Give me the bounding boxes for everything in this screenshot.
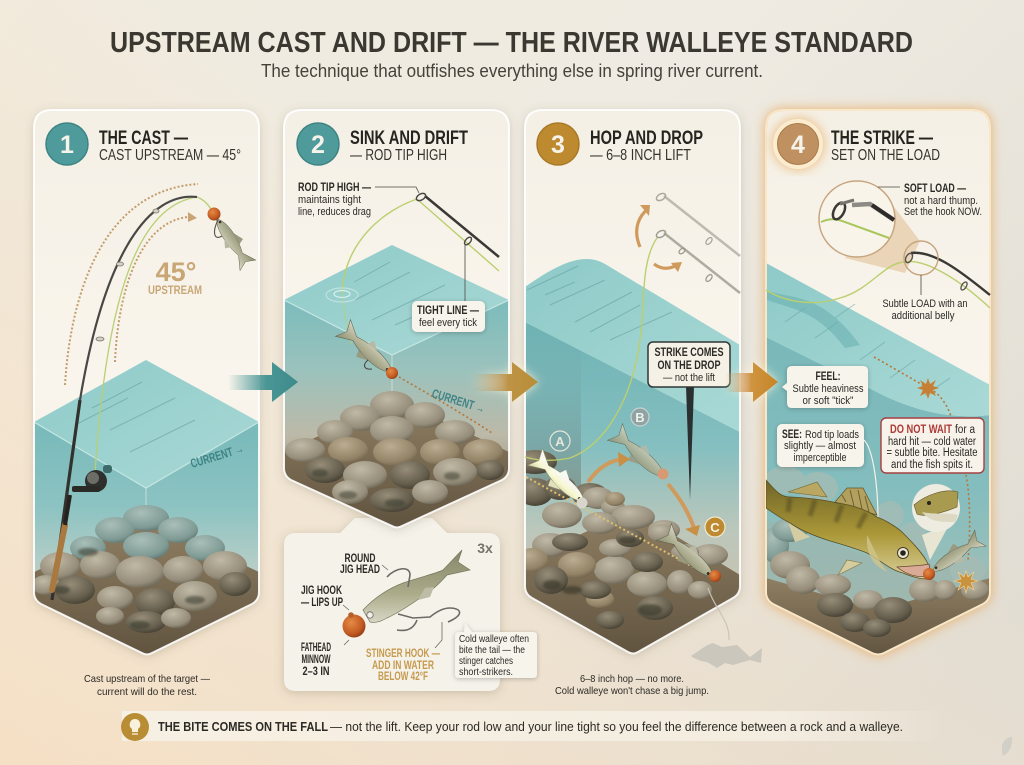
- subtle load label: additional belly: [892, 310, 955, 322]
- drifting minnow and jig: [335, 320, 400, 381]
- see callout: slightly — almost: [784, 440, 856, 452]
- label: stinger hook: STINGER HOOK —: [366, 648, 440, 660]
- label: stinger hook: ADD IN WATER: [372, 660, 435, 672]
- strike jig: [923, 568, 935, 580]
- feel callout: or soft "tick": [802, 395, 854, 407]
- tight line callout: feel every tick: [419, 317, 477, 329]
- small magnifier ring: [904, 241, 938, 275]
- see callout: [777, 424, 864, 467]
- 45 degree label: [148, 257, 202, 297]
- heading 4: THE STRIKE —: [831, 128, 933, 149]
- label: round jig head: [340, 553, 380, 576]
- label: fathead minnow: 2–3 IN: [302, 666, 330, 678]
- current label 1: CURRENT →: [189, 441, 245, 471]
- label: jig hook: — LIPS UP: [301, 597, 343, 609]
- tip text: — not the lift. Keep your rod low and your line tight so you feel the difference between a rock and a walleye.: [330, 719, 903, 734]
- subtle load label: Subtle LOAD with an: [882, 298, 968, 310]
- heading 1: CAST UPSTREAM — 45°: [99, 147, 241, 164]
- position C: [656, 517, 725, 585]
- strike callout: STRIKE COMES: [654, 347, 724, 359]
- soft load text: SOFT LOAD —: [904, 183, 966, 195]
- see callout: Rod tip loads: [805, 429, 859, 441]
- lift arrowheads: [640, 205, 682, 272]
- inset: jig rig 3x: [284, 518, 537, 691]
- heading 3: HOP AND DROP: [590, 128, 703, 149]
- magnified minnow: [363, 550, 470, 622]
- water and riverbed 1: [32, 360, 259, 660]
- 45 degree label: 45°: [156, 257, 196, 287]
- panel 4 outline: [766, 110, 990, 654]
- drift path: [399, 377, 492, 433]
- label: round jig head: ROUND: [344, 553, 376, 565]
- entry ripple: [326, 288, 358, 302]
- caption 1: [84, 673, 210, 698]
- card 3: [525, 110, 740, 654]
- dotted strike path: [874, 357, 970, 560]
- watermark leaf: [1002, 737, 1012, 756]
- step badge 3: 3: [551, 131, 565, 159]
- strike star lower: [954, 571, 978, 593]
- label: stinger hook: BELOW 42°F: [378, 671, 428, 683]
- rod tip callout: [298, 182, 371, 218]
- lift arrows: [637, 209, 677, 268]
- note: short strikers: short-strikers.: [459, 667, 513, 678]
- label: fathead minnow: [301, 642, 331, 678]
- hop arrowheads: [618, 452, 700, 536]
- heading 3: [590, 128, 703, 164]
- hop arrows: [588, 459, 695, 531]
- heading 2: — ROD TIP HIGH: [350, 147, 447, 164]
- do not wait warning: and the fish spits it.: [891, 459, 973, 471]
- tight line callout: TIGHT LINE —: [417, 305, 479, 317]
- caption 3: [555, 673, 709, 697]
- inset bite view: [912, 484, 960, 560]
- panel 1 outline: [34, 110, 259, 654]
- caption 3: 6–8 inch hop — no more.: [580, 673, 684, 685]
- card 2: [284, 110, 509, 528]
- magnification 3x: 3x: [477, 540, 493, 556]
- label: jig hook: [301, 585, 343, 609]
- heading 2: SINK AND DRIFT: [350, 128, 468, 149]
- panel 2 outline: [284, 110, 509, 528]
- step badge 4: 4: [791, 131, 805, 159]
- step badge 1: [46, 123, 88, 165]
- strike callout: [648, 342, 730, 500]
- heading 2: [350, 128, 468, 164]
- card 1: [34, 110, 259, 654]
- hooks: [387, 569, 460, 631]
- magnifier circle: [819, 181, 895, 257]
- arrow 3 to 4: [725, 362, 778, 402]
- water and riverbed 4: [761, 263, 990, 660]
- do not wait warning: [881, 418, 984, 473]
- step badge 1: 1: [60, 131, 74, 159]
- see callout: SEE:: [782, 429, 802, 441]
- fishing line 4: [766, 262, 990, 308]
- icon: lightbulb: [121, 713, 149, 741]
- heading 4: SET ON THE LOAD: [831, 147, 940, 164]
- step badge 3: [537, 123, 579, 165]
- caption 1: Cast upstream of the target —: [84, 673, 210, 685]
- low rod: [655, 229, 740, 293]
- bottom tip bar: [121, 711, 952, 741]
- line to jig: [197, 197, 213, 212]
- feel callout: Subtle heaviness: [792, 383, 864, 395]
- step badge 4: [773, 119, 823, 169]
- fishing line 1: [94, 197, 197, 490]
- tip text: THE BITE COMES ON THE FALL: [158, 719, 328, 734]
- subtitle: The technique that outfishes everything else in spring river current.: [261, 61, 763, 81]
- dotted cast arcs: [65, 184, 198, 385]
- spinning reel: [72, 465, 112, 492]
- caption 1: current will do the rest.: [97, 686, 197, 698]
- heading 1: [99, 128, 241, 164]
- walleye: [766, 480, 931, 579]
- feel callout: [782, 366, 868, 408]
- arrow 1 to 2: [228, 362, 298, 402]
- card 4: [766, 110, 990, 654]
- dotted bottom path: [526, 477, 712, 577]
- 45 degree label: UPSTREAM: [148, 283, 202, 297]
- arrow 2 to 3: [472, 362, 538, 402]
- leader line: [375, 187, 419, 193]
- position B: B: [635, 410, 645, 425]
- position A: A: [555, 434, 565, 449]
- tight line callout: [412, 245, 485, 332]
- fishing rod: [52, 197, 197, 600]
- position A: [527, 431, 592, 510]
- position B: [607, 408, 672, 485]
- label: round jig head: JIG HEAD: [340, 564, 380, 576]
- soft load text: Set the hook NOW.: [904, 206, 982, 218]
- note: short strikers: bite the tail — the: [459, 645, 525, 656]
- strike star upper: [917, 378, 939, 399]
- label: fathead minnow: MINNOW: [302, 654, 331, 666]
- rod 4: [904, 252, 990, 295]
- rod 2: [415, 192, 499, 257]
- do not wait warning: for a: [955, 424, 976, 436]
- leader lines: [343, 565, 442, 648]
- heading 4: [831, 128, 940, 164]
- jig head: [342, 612, 366, 638]
- caption 3: Cold walleye won't chase a big jump.: [555, 685, 709, 697]
- label: fathead minnow: FATHEAD: [301, 642, 331, 654]
- see callout: imperceptible: [794, 452, 846, 464]
- panel 2: sink and drift: [284, 110, 509, 530]
- arc arrowhead: [188, 212, 197, 222]
- note: short strikers: stinger catches: [459, 656, 513, 667]
- inset card: [284, 518, 500, 691]
- feel callout: FEEL:: [816, 371, 840, 383]
- lifted rod ghost: [655, 192, 740, 256]
- walleye silhouette: [691, 588, 762, 668]
- soft load text: [878, 183, 982, 218]
- label: stinger hook: [366, 648, 440, 683]
- strike callout: — not the lift: [663, 372, 715, 384]
- water and riverbed 2: [284, 245, 509, 530]
- soft load text: not a hard thump.: [904, 195, 978, 207]
- current label 2: CURRENT →: [430, 386, 487, 416]
- heading 3: — 6–8 INCH LIFT: [590, 147, 691, 164]
- fishing line 2: [342, 199, 499, 345]
- rod tip callout: ROD TIP HIGH —: [298, 182, 371, 194]
- do not wait warning: = subtle bite. Hesitate: [886, 447, 978, 459]
- magnifier cone: [845, 195, 920, 273]
- jig and minnow 1: [208, 208, 257, 271]
- fishing line 3: [525, 238, 657, 460]
- position C: C: [710, 520, 720, 535]
- strike callout: ON THE DROP: [658, 360, 721, 372]
- panel 3: hop and drop: [513, 110, 762, 668]
- strike minnow: [927, 529, 986, 579]
- tip strip: [122, 711, 952, 741]
- step badge 2: 2: [311, 131, 325, 159]
- step badge 2: [297, 123, 339, 165]
- do not wait warning: hard hit — cold water: [888, 436, 976, 448]
- subtle load label: [882, 275, 968, 322]
- label: jig hook: JIG HOOK: [301, 585, 343, 597]
- rod tip callout: line, reduces drag: [298, 206, 371, 218]
- note: short strikers: Cold walleye often: [459, 634, 529, 645]
- panel 4: the strike: [761, 110, 990, 660]
- rod tip callout: maintains tight: [298, 194, 361, 206]
- see leader: [864, 440, 878, 520]
- do not wait warning: DO NOT WAIT: [890, 424, 952, 436]
- heading 1: THE CAST —: [99, 128, 188, 149]
- title: UPSTREAM CAST AND DRIFT — THE RIVER WALLEYE STANDARD: [110, 27, 913, 59]
- water and riverbed 3: [513, 259, 740, 660]
- panel 3 outline: [525, 110, 740, 654]
- panel 1: the cast: [32, 110, 259, 660]
- note: short strikers: [455, 623, 537, 678]
